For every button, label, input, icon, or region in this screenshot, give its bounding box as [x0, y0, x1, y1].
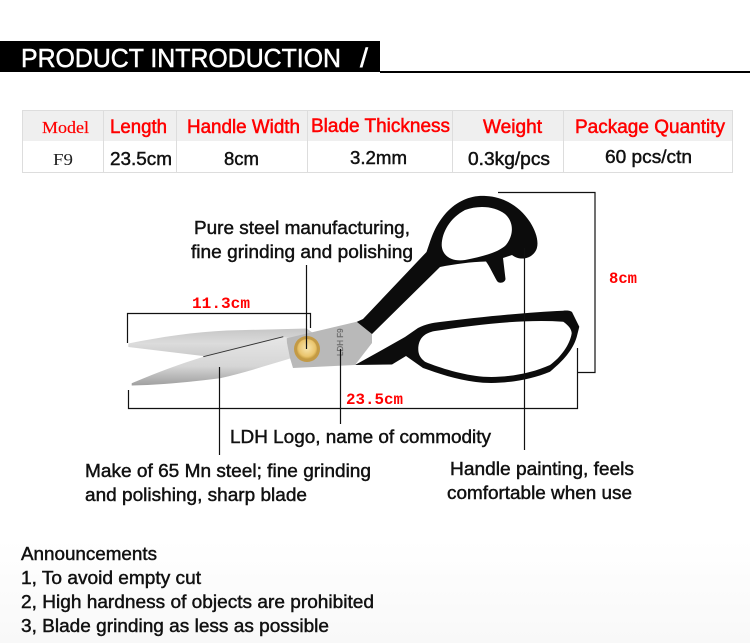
table header row: Blade Thickness: [311, 116, 450, 137]
logo engraving: LDH F9: [336, 328, 345, 356]
callout: steel blade: Make of 65 Mn steel; fine grinding: [85, 461, 371, 481]
specification table: [22, 110, 732, 173]
table value row: [53, 147, 692, 169]
callout: handle painting: Handle painting, feels: [450, 459, 634, 479]
lower blade: [132, 337, 300, 386]
table header row: Length: [110, 117, 167, 138]
brass rivet: [294, 336, 320, 362]
lower handle: [355, 310, 579, 383]
table value row: 8cm: [224, 149, 259, 169]
section header: product introduction: /: [360, 43, 369, 73]
announcements: [21, 544, 374, 636]
table value row: 0.3kg/pcs: [468, 149, 550, 169]
total length dimension: 23.5cm: 23.5cm: [346, 391, 403, 409]
callout: pure steel: [191, 218, 413, 349]
handle width dimension: 8cm: [498, 192, 637, 372]
table value row: 60 pcs/ctn: [605, 147, 692, 167]
table value row: 3.2mm: [350, 148, 407, 168]
table header row: Package Quantity: [575, 117, 725, 138]
announcements: 1, To avoid empty cut: [21, 568, 201, 588]
announcements: 3, Blade grinding as less as possible: [21, 616, 329, 636]
table value row: 23.5cm: [110, 149, 172, 169]
callout: pure steel: fine grinding and polishing: [191, 242, 413, 262]
section header: product introduction: [0, 41, 750, 73]
callout: handle painting: [447, 248, 634, 503]
callout: handle painting: comfortable when use: [447, 483, 632, 503]
callout: steel blade: and polishing, sharp blade: [85, 485, 307, 505]
announcements: 2, High hardness of objects are prohibited: [21, 592, 374, 612]
scissors illustration: [128, 196, 579, 386]
table header row: [42, 116, 725, 138]
table value row: F9: [53, 150, 73, 169]
callout: steel blade: [85, 367, 371, 505]
table header row: Weight: [483, 117, 543, 138]
blade length dimension: 11.3cm: [128, 295, 310, 343]
blade length dimension: 11.3cm: 11.3cm: [192, 295, 250, 313]
upper blade: [128, 328, 330, 356]
table header row: Model: [42, 118, 89, 137]
section header: product introduction: PRODUCT INTRODUCTION: [21, 43, 341, 73]
total length dimension: 23.5cm: [128, 348, 578, 409]
table header row: Handle Width: [187, 117, 300, 138]
upper handle: [350, 196, 537, 345]
callout: pure steel: Pure steel manufacturing,: [194, 218, 410, 238]
callout: logo: LDH Logo, name of commodity: [230, 427, 491, 447]
announcements: Announcements: [21, 544, 157, 564]
handle width dimension: 8cm: 8cm: [609, 270, 637, 288]
pivot plate: [287, 322, 372, 368]
